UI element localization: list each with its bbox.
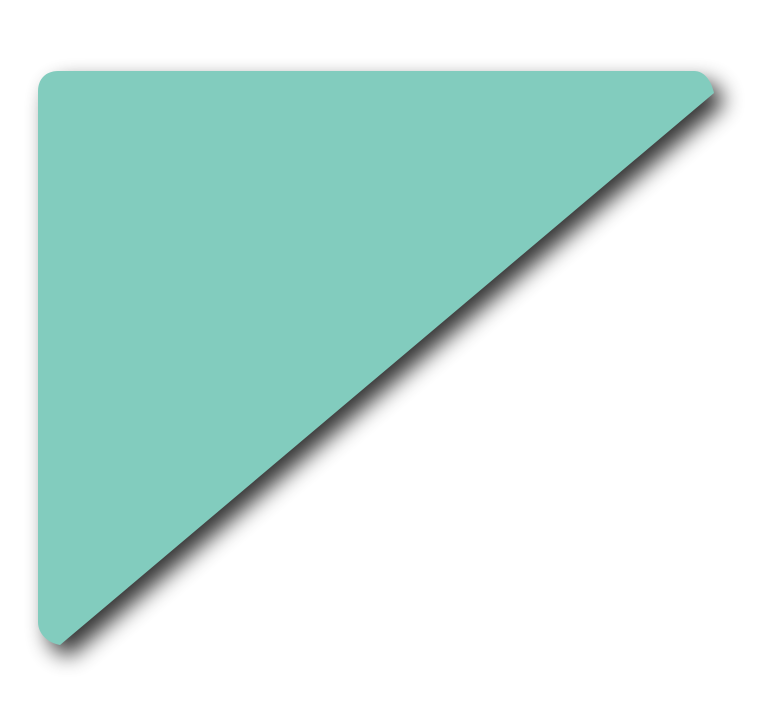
panel: teal rounded triangle with drop shadow bbox=[38, 71, 714, 645]
